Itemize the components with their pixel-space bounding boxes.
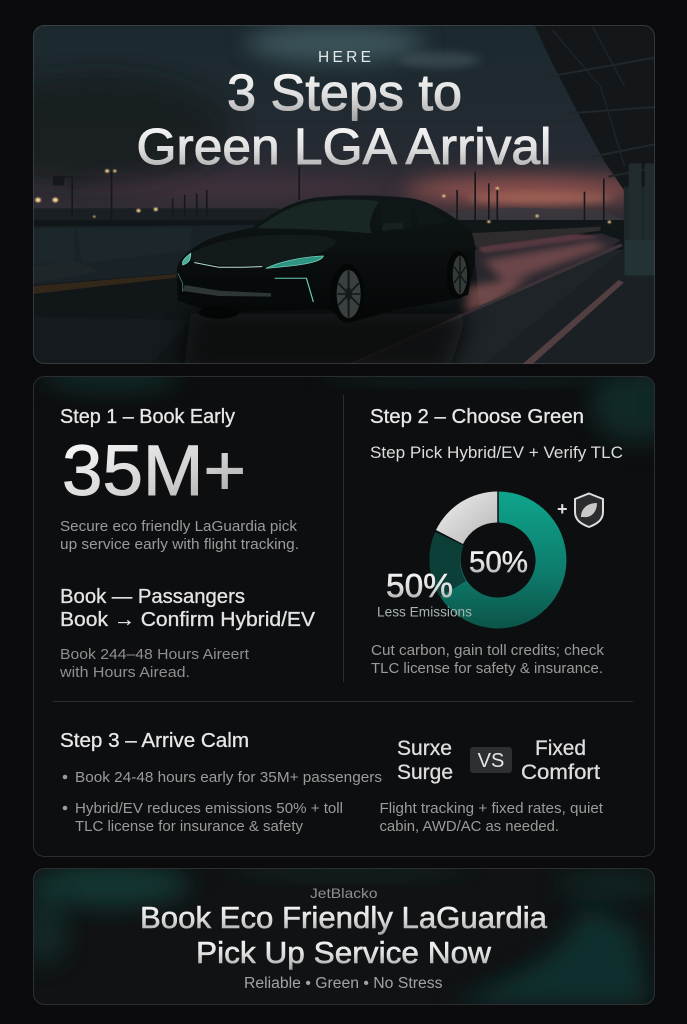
step 3: [60, 730, 604, 835]
hero title: 3 Steps to: [227, 64, 462, 121]
hero eyebrow: HERE: [318, 49, 371, 66]
comparison: surge vs fixed: Surxe: [397, 737, 452, 760]
step 1 heading: Step 1 – Book Early: [60, 406, 235, 428]
hero photo: car at dusk on wet road: [0, 20, 660, 373]
comparison: surge vs fixed: Fixed: [535, 737, 586, 760]
step 1 description: Secure eco friendly LaGuardia pick: [60, 518, 297, 535]
CTA brand: JetBlacko: [310, 885, 378, 901]
step 3 bullets: TLC license for insurance & safety: [75, 818, 303, 835]
barrier: [33, 225, 255, 285]
stat: 50% less emissions: Less Emissions: [377, 604, 472, 620]
road reflection: [474, 233, 621, 310]
step 3 heading: Step 3 – Arrive Calm: [60, 730, 249, 752]
headlights and accents: [178, 253, 323, 302]
booking subheading: [60, 586, 316, 631]
step 2 description: Cut carbon, gain toll credits; check: [371, 642, 605, 659]
booking subheading: Book → Confirm Hybrid/EV: [60, 609, 316, 631]
icon: leaf shield: [575, 494, 603, 527]
step 1 description: [60, 518, 299, 553]
step 3 bullets: Book 24-48 hours early for 35M+ passengers: [75, 769, 382, 786]
comparison: surge vs fixed: [397, 737, 600, 784]
panel: call to action: [21, 858, 665, 1005]
step 3 bullets: Hybrid/EV reduces emissions 50% + toll: [75, 800, 343, 817]
CTA headline: Pick Up Service Now: [196, 935, 492, 970]
comparison description: [380, 800, 604, 835]
step 1 description: up service early with flight tracking.: [60, 536, 299, 553]
hero title: [136, 64, 552, 175]
booking note: [59, 646, 250, 681]
panel: hero: [0, 20, 660, 373]
comparison: surge vs fixed: Comfort: [521, 761, 600, 784]
plus sign: +: [557, 499, 568, 519]
car body: [177, 195, 475, 322]
booking note: with Hours Airead.: [59, 664, 190, 681]
step 2 description: TLC license for safety & insurance.: [371, 660, 603, 677]
step 2 description: [371, 642, 605, 677]
CTA tagline: Reliable • Green • No Stress: [244, 975, 443, 992]
steps panel background: [41, 377, 655, 451]
hero title: Green LGA Arrival: [136, 118, 552, 175]
stat: 50% less emissions: 50%: [386, 567, 453, 604]
comparison description: Flight tracking + fixed rates, quiet: [380, 800, 604, 817]
lamps: [64, 166, 605, 220]
step 3 bullets: [63, 769, 382, 835]
booking subheading: Book — Passangers: [60, 586, 245, 608]
CTA headline: [140, 900, 548, 970]
canopy: [535, 25, 655, 194]
step 2 heading: Step 2 – Choose Green: [370, 406, 584, 428]
VS badge: [470, 747, 512, 773]
car reflection: [183, 313, 468, 373]
CTA headline: Book Eco Friendly LaGuardia: [140, 900, 548, 935]
comparison description: cabin, AWD/AC as needed.: [380, 818, 559, 835]
walkway: [448, 250, 622, 363]
stat: 35M+: 35M+: [62, 432, 246, 511]
wheels: [199, 251, 469, 323]
step 2 subheading: Step Pick Hybrid/EV + Verify TLC: [370, 443, 623, 462]
step 2: [370, 406, 623, 677]
CTA background: [34, 869, 654, 1004]
comparison: surge vs fixed: Surge: [397, 761, 453, 784]
step 1: [59, 406, 316, 681]
stat: 50% less emissions: [377, 567, 472, 620]
donut chart: [429, 491, 566, 628]
booking note: Book 244–48 Hours Aireert: [60, 646, 250, 663]
donut centre value: 50%: [469, 546, 528, 579]
panel: steps: [33, 360, 687, 857]
VS badge: VS: [478, 750, 504, 772]
